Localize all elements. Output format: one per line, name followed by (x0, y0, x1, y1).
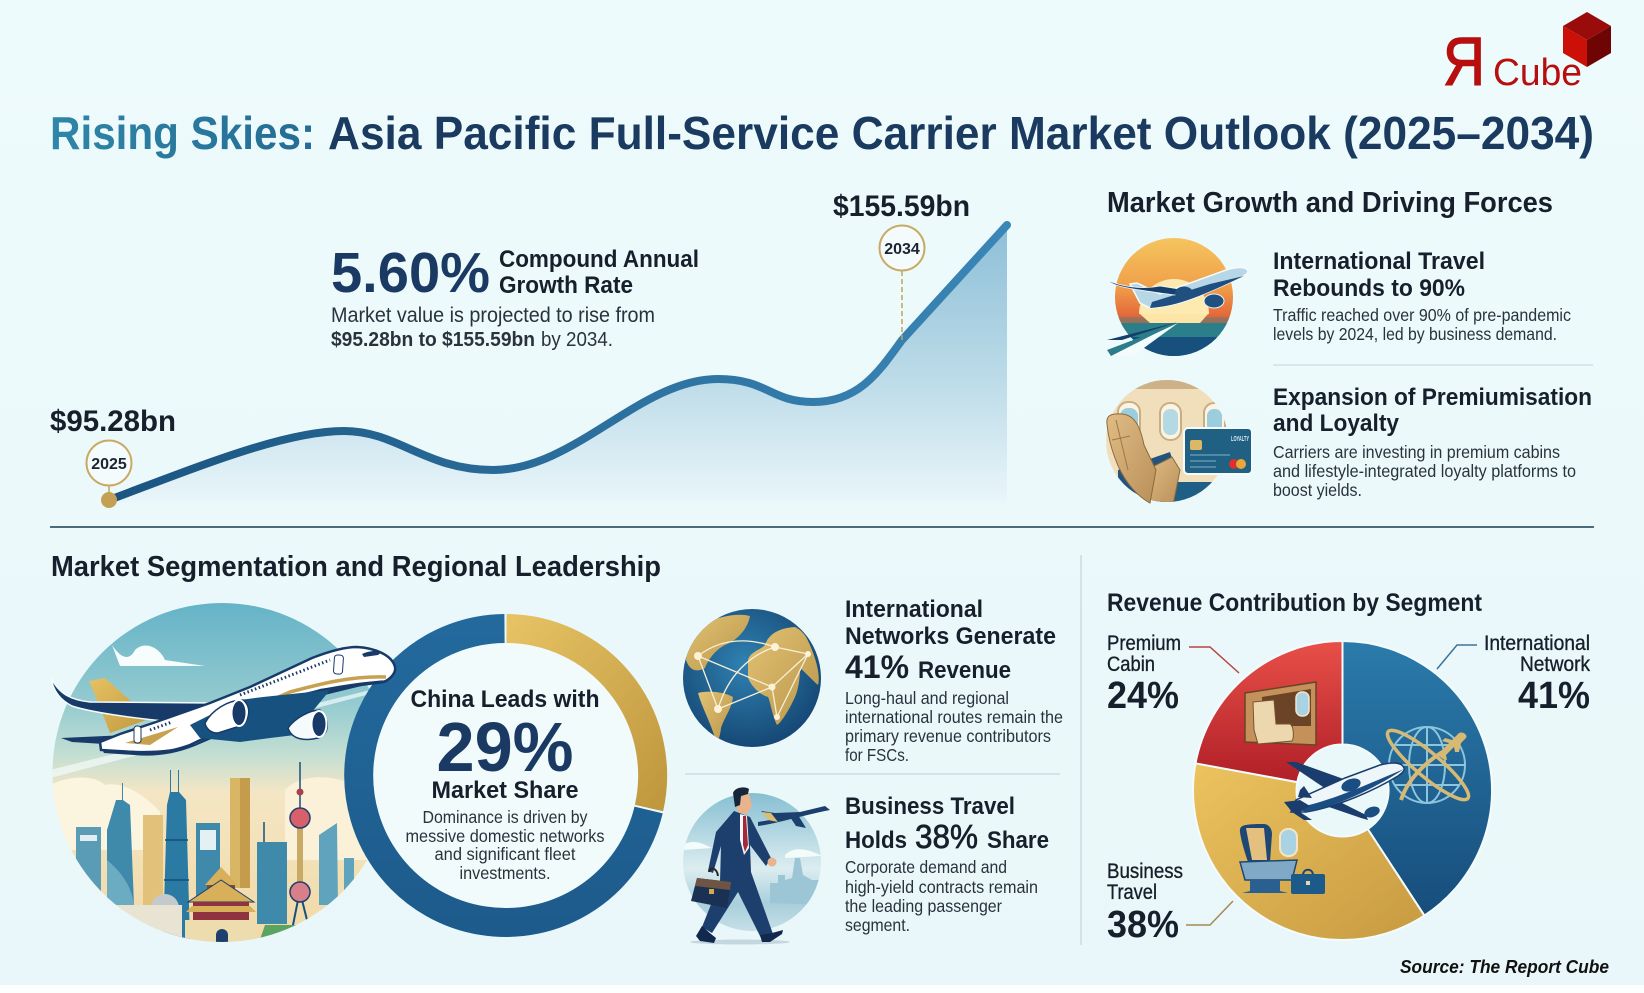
icon: plane at sunset (1107, 238, 1248, 360)
text: international networks: Revenue (918, 657, 1011, 684)
label: international network: 41% (1518, 675, 1590, 717)
heading: Market Growth and Driving Forces (1107, 187, 1553, 219)
end marker 2034: 2034 (884, 241, 920, 258)
start marker 2025 (86, 440, 132, 508)
text: international networks: primary revenue contributors (845, 726, 1051, 746)
title: Asia Pacific Full-Service Carrier Market Outlook (2025–2034) (328, 107, 1594, 159)
source note: Source: The Report Cube (1400, 957, 1609, 977)
text: business travel (845, 793, 1049, 935)
panel: market growth line chart (50, 190, 1007, 508)
text: business travel: high-yield contracts remain (845, 877, 1038, 897)
loyalty card (1184, 428, 1252, 474)
label: business travel: Business (1107, 860, 1183, 883)
text: premiumisation and loyalty: boost yields. (1273, 480, 1362, 500)
logo: Report Cube (1443, 12, 1611, 100)
chart growth line (109, 225, 1007, 500)
rear wing (51, 678, 240, 735)
donut text: Market Share (432, 777, 578, 804)
text: business travel: the leading passenger (845, 896, 1002, 916)
callout: CAGR: 5.60% (331, 241, 490, 305)
tail fin (89, 678, 152, 733)
icon: globe with routes (683, 609, 821, 747)
icon: premium seat (1245, 682, 1316, 745)
label: premium cabin: Premium (1107, 632, 1181, 655)
title: Rising Skies: (50, 107, 315, 159)
icon: premium cabin and loyalty card (1100, 380, 1252, 507)
text: premiumisation and loyalty: Expansion of Premiumisation (1273, 384, 1592, 411)
text: business travel: Business Travel (845, 793, 1015, 820)
callout: CAGR: Growth Rate (499, 272, 633, 299)
callout: CAGR (331, 241, 699, 351)
text: international networks: Long-haul and regional (845, 688, 1009, 708)
heading: Market Segmentation and Regional Leadership (51, 551, 661, 583)
label: international network (1437, 632, 1590, 717)
label: premium cabin: Cabin (1107, 653, 1155, 676)
label: premium cabin: 24% (1107, 675, 1179, 717)
text: international networks: international routes remain the (845, 707, 1063, 727)
label: business travel: 38% (1107, 904, 1179, 946)
donut text: China Leads with (410, 686, 600, 713)
start marker 2025: 2025 (91, 456, 127, 473)
label: premium cabin (1107, 632, 1239, 717)
icon: economy seat and briefcase (1240, 824, 1325, 894)
start value label: $95.28bn (50, 405, 176, 438)
callout: CAGR: Market value is projected to rise from (331, 304, 655, 327)
text: international travel: levels by 2024, led by business demand. (1273, 324, 1557, 344)
callout: CAGR: Compound Annual (499, 246, 699, 273)
label: business travel (1107, 860, 1233, 946)
donut text: 29% (436, 708, 574, 786)
logo: Report Cube: Я (1443, 24, 1485, 100)
text: business travel: Share (987, 827, 1049, 854)
text: international networks: 41% (845, 649, 909, 685)
text: premiumisation and loyalty (1273, 384, 1592, 500)
donut text: and significant fleet (434, 844, 576, 864)
text: business travel: 38% (915, 818, 978, 855)
text: international networks: for FSCs. (845, 745, 909, 765)
loyalty card: LOYALTY (1231, 436, 1249, 443)
callout: CAGR: $95.28bn to $155.59bn (331, 329, 535, 351)
end marker 2034 (880, 226, 924, 340)
donut: China market share (358, 628, 653, 922)
text: business travel: Corporate demand and (845, 857, 1007, 877)
panel: market growth and driving forces (1100, 187, 1593, 507)
fuselage (100, 647, 395, 753)
text: premiumisation and loyalty: Carriers are investing in premium cabins (1273, 442, 1560, 462)
label: international network: International (1484, 632, 1590, 655)
panel: market segmentation and regional leadership (50, 551, 1063, 945)
text: international networks: Networks Generate (845, 623, 1056, 650)
main wing underside (190, 690, 330, 742)
text: international networks (845, 596, 1063, 765)
panel: revenue contribution by segment (1107, 589, 1590, 946)
donut text: investments. (460, 863, 550, 883)
text: international travel (1273, 248, 1571, 344)
icon: business traveller (683, 787, 830, 944)
small plane (758, 806, 830, 826)
icon: globe and plane (1380, 722, 1476, 808)
label: business travel: Travel (1107, 881, 1157, 904)
text: international travel: International Travel (1273, 248, 1485, 275)
engine left (205, 700, 249, 733)
illustration: China skyline (50, 603, 392, 945)
label: international network: Network (1520, 653, 1590, 676)
chart area fill (109, 225, 1007, 503)
icon: centre plane (1284, 762, 1404, 820)
illustration: large airliner (51, 647, 395, 756)
logo cube icon (1563, 12, 1611, 67)
heading: Revenue Contribution by Segment (1107, 589, 1483, 617)
engine right (288, 710, 327, 739)
callout: CAGR: by 2034. (541, 329, 613, 351)
text: premiumisation and loyalty: and Loyalty (1273, 410, 1400, 437)
text: international networks: International (845, 596, 983, 623)
donut text (406, 686, 605, 883)
donut text: Dominance is driven by (422, 807, 588, 827)
donut chart (1193, 641, 1492, 940)
text: premiumisation and loyalty: and lifestyle-integrated loyalty platforms to (1273, 461, 1576, 481)
man (696, 787, 783, 943)
text: international travel: Traffic reached over 90% of pre-pandemic (1273, 305, 1571, 325)
text: international travel: Rebounds to 90% (1273, 275, 1465, 302)
logo: Report Cube: Cube (1493, 52, 1582, 94)
text: business travel: Holds (845, 827, 907, 854)
text: business travel: segment. (845, 915, 910, 935)
donut text: messive domestic networks (406, 826, 605, 846)
end value label: $155.59bn (833, 190, 970, 223)
ground shadow (690, 940, 790, 944)
briefcase (691, 869, 731, 908)
